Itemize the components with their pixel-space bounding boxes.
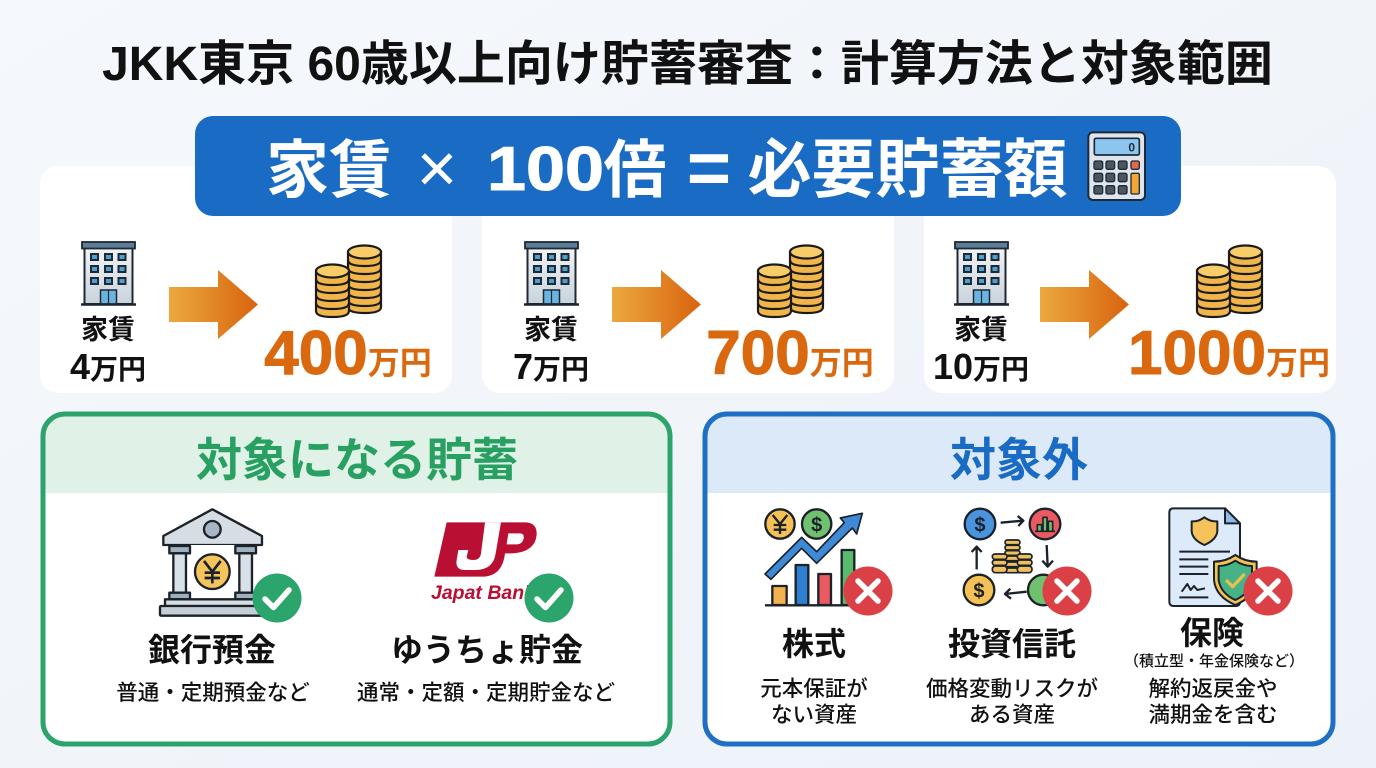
text: rent amount: 7万円 [513, 346, 589, 387]
icon: insurance document [1169, 508, 1257, 606]
text: rent amount: 4万円 [70, 346, 146, 387]
text: postal savings: ゆうちょ貯金 [391, 632, 583, 668]
formula banner [195, 116, 1181, 216]
text: investment trust detail: 価格変動リスクが [926, 677, 1098, 701]
icon: JP logo [434, 522, 537, 577]
panel: rent example 7万円 [482, 166, 894, 393]
heading: eligible savings: 対象になる貯蓄 [196, 434, 518, 486]
text: formula: × [417, 129, 457, 207]
icon: investment trust cycle: $ [974, 514, 986, 536]
text: stocks detail line 2: ない資産 [771, 703, 857, 727]
icon: check mark [524, 574, 574, 622]
icon: investment trust cycle [964, 509, 1060, 605]
text: rent amount: 10万円 [933, 346, 1029, 387]
text: insurance: 保険 [1180, 615, 1244, 651]
text: required savings: 400万円 [264, 319, 432, 388]
text: formula: = [687, 126, 731, 211]
icon: apartment building [524, 242, 579, 304]
panel: rent example 10万円 [924, 166, 1336, 393]
icon: check mark [252, 574, 302, 622]
text: required savings: 700万円 [706, 319, 874, 388]
text: formula: 100 [487, 135, 604, 204]
panel: rent example 4万円 [40, 166, 452, 393]
icon: stocks chart [765, 509, 862, 605]
icon: cross mark [1244, 566, 1292, 616]
text: bank deposit: 銀行預金 [148, 632, 276, 668]
icon: investment trust cycle: $ [973, 580, 985, 602]
icon: calculator [1088, 132, 1145, 200]
text: investment trust: 投資信託 [948, 626, 1076, 662]
arrow [169, 270, 258, 339]
text: postal savings detail: 通常・定額・定期貯金など [357, 681, 615, 705]
icon: coins [758, 246, 823, 317]
text: insurance detail line 2: 満期金を含む [1148, 703, 1278, 727]
text: formula: 家賃 [266, 136, 392, 206]
text: insurance qualifier: （積立型・年金保険など） [1124, 653, 1304, 670]
icon: cross mark [1042, 566, 1092, 616]
icon: coins [1197, 246, 1262, 317]
panel: not eligible [705, 414, 1333, 744]
icon: calculator: 0 [1128, 141, 1135, 155]
text: formula: 倍 [604, 136, 666, 206]
title: JKK東京 60歳以上向け貯蓄審査：計算方法と対象範囲 [102, 38, 1273, 91]
icon: bank [160, 509, 263, 616]
text: bank deposit detail: 普通・定期預金など [116, 681, 310, 705]
text: rent label: 家賃 [81, 315, 135, 345]
icon: apartment building [954, 242, 1009, 304]
arrow [612, 270, 701, 339]
text: rent label: 家賃 [954, 315, 1008, 345]
text: insurance detail: 解約返戻金や [1148, 677, 1278, 701]
text: investment trust detail line 2: ある資産 [969, 703, 1055, 727]
arrow [1040, 270, 1129, 339]
icon: apartment building [81, 242, 136, 304]
text: stocks: 株式 [782, 626, 846, 662]
text: formula: 必要貯蓄額 [748, 134, 1068, 206]
text: logo caption: Japat Bank [431, 582, 536, 604]
text: rent label: 家賃 [524, 315, 578, 345]
text: formula [266, 126, 1068, 211]
panel: eligible savings [43, 414, 670, 744]
text: stocks detail: 元本保証が [760, 677, 868, 701]
heading: not eligible: 対象外 [950, 434, 1088, 486]
text: required savings: 1000万円 [1128, 319, 1330, 388]
icon: coins [316, 246, 381, 317]
icon: cross mark [844, 566, 892, 616]
icon: stocks chart: $ [811, 514, 822, 536]
